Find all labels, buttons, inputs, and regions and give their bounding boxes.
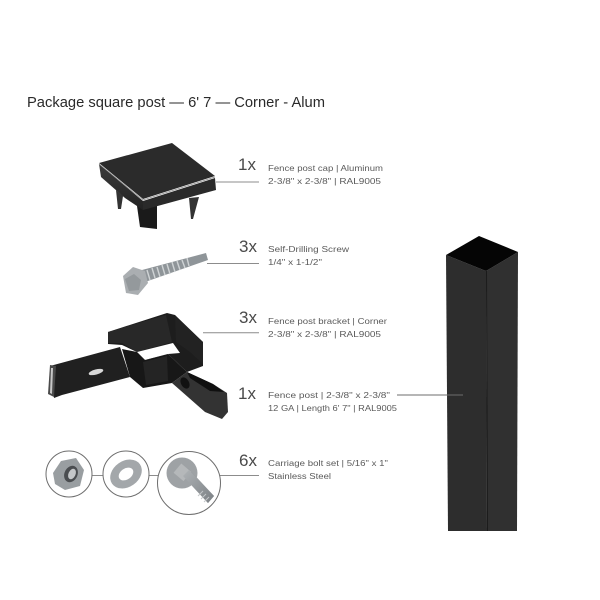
connector: post <box>397 394 463 396</box>
back band and right wall <box>108 313 203 372</box>
icon: washer <box>103 451 149 497</box>
label: bolt set: Stainless Steel <box>268 471 331 481</box>
connector: bolt set <box>92 474 259 476</box>
quantity: post: 1x <box>238 384 256 403</box>
quantity: bracket: 3x <box>239 308 257 327</box>
icon: self-drilling screw <box>123 253 208 295</box>
connector: cap <box>216 181 259 183</box>
quantity: cap: 1x <box>238 155 256 174</box>
label: bracket <box>268 316 387 339</box>
icon: fence post bracket <box>48 313 228 419</box>
title: Package square post — 6' 7 — Corner - Alum <box>27 94 325 111</box>
icon: hex nut <box>46 451 92 497</box>
label: cap <box>268 163 383 186</box>
icon: fence post <box>446 236 518 531</box>
icon: carriage bolt <box>158 452 220 514</box>
label: screw: Self-Drilling Screw <box>268 244 350 254</box>
right arm <box>172 372 228 419</box>
label: screw: 1/4" x 1-1/2" <box>268 257 322 267</box>
quantity: screw: 3x <box>239 237 257 256</box>
label: post <box>268 390 397 413</box>
connector: bracket <box>203 332 259 334</box>
left arm <box>50 347 130 398</box>
label: bracket: 2-3/8" x 2-3/8" | RAL9005 <box>268 329 381 339</box>
quantity: bolt set: 6x <box>239 451 257 470</box>
label: post: 12 GA | Length 6' 7" | RAL9005 <box>268 403 397 413</box>
label: post: Fence post | 2-3/8" x 2-3/8" <box>268 390 390 400</box>
label: bolt set: Carriage bolt set | 5/16" x 1" <box>268 458 388 468</box>
label: bolt set <box>268 458 388 481</box>
icon: fence post cap <box>99 143 216 229</box>
label: bracket: Fence post bracket | Corner <box>268 316 387 326</box>
label: screw <box>268 244 350 267</box>
connector: screw <box>207 262 259 264</box>
central clamp <box>122 349 187 388</box>
label: cap: 2-3/8" x 2-3/8" | RAL9005 <box>268 176 381 186</box>
opening <box>137 343 180 360</box>
label: cap: Fence post cap | Aluminum <box>268 163 383 173</box>
